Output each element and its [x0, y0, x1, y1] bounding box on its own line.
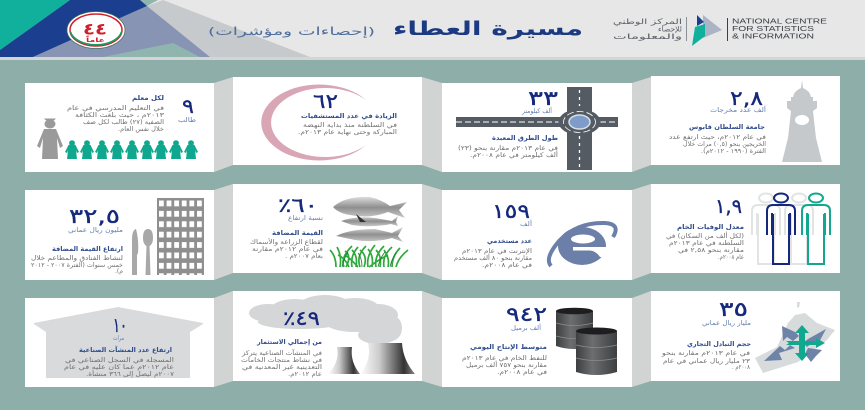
heading: عدد مستخدمي [487, 237, 532, 245]
unit: نسبة ارتفاع [288, 214, 323, 222]
heading: حجم التبادل التجاري [687, 340, 751, 348]
panel: share of investment [241, 295, 415, 378]
body text: المسجلة في السجل الصناعي في [65, 357, 174, 364]
body text [454, 248, 532, 269]
body text: السلطنة في عام ٢٠١٣م [669, 240, 744, 247]
folded strip row 2 [25, 184, 840, 280]
icon: internet browser e [549, 223, 616, 266]
panel: industrial establishments [34, 307, 203, 378]
panel: hotels and restaurants value added [31, 198, 204, 275]
icon: oil barrels [556, 308, 617, 375]
icon: crescent [261, 85, 366, 161]
panel: crude death rate [666, 194, 830, 264]
body text [462, 355, 547, 376]
body text: ٢٣ مليار ريال عماني في عام [663, 358, 751, 365]
body text: عام ٢٠١٢م عما كان عليه في عام [64, 364, 174, 371]
body text: في عام ٢٠١٢م مقارنة [252, 246, 323, 253]
icon: fish and grass [330, 197, 408, 267]
body text: مقارنة بنحو ٨٠ ألف مستخدم [454, 253, 532, 262]
number: 60 percent: ٦٠٪ [278, 193, 318, 217]
unit: ألف كيلومتر [521, 106, 552, 115]
unit: طالب [178, 116, 196, 124]
body text [458, 145, 558, 159]
body text: في السلطنة منذ بداية النهضة [303, 122, 397, 129]
heading: القيمة المضافة [272, 229, 323, 237]
body text [64, 357, 175, 378]
body text: بعام ٢٠٠٧م . [285, 253, 323, 260]
panel: internet users [454, 199, 616, 269]
body text [669, 134, 766, 155]
body text: عام ٢٠١٢م. [288, 371, 322, 378]
folded strip row 1 [25, 76, 840, 172]
panel: sultan qaboos university [669, 80, 822, 162]
body text: م). [115, 268, 123, 275]
unit: ألف برميل [511, 323, 541, 332]
body text: في المنشآت الصناعية يتركز [241, 348, 322, 357]
heading: متوسط الإنتاج اليومي [470, 343, 547, 351]
heading: من إجمالي الاستثمار [256, 338, 322, 346]
heading: ارتفاع القيمة المضافة [52, 245, 123, 253]
number: 32.5: ٣٢,٥ [69, 204, 120, 228]
number: 1.9: ١,٩ [715, 194, 742, 218]
panel: trade volume [661, 297, 835, 373]
body text: في التعليم المدرسي في عام [67, 105, 164, 112]
body text [67, 105, 165, 133]
body text: ٢٠٠٨م . [732, 364, 751, 371]
logo: national centre for statistics and information: FOR STATISTICS [732, 24, 814, 33]
panel: students per teacher [37, 94, 198, 159]
number: 62: ٦٢ [313, 89, 338, 113]
body text: ٢٠٠٧م ليصل إلى ٣٦٦ منشأة. [86, 369, 175, 378]
body text: في نشاط منتجات الخامات [241, 357, 322, 364]
body text: ألف كيلومتر في عام ٢٠٠٨م. [470, 150, 558, 159]
heading: الزيادة في عدد المستشفيات [301, 112, 397, 120]
heading: طول الطرق المعبدة [492, 134, 558, 142]
body text: التعدينية غير المعدنية في [242, 364, 322, 371]
logo: national centre for statistics and information: والمعلومات [613, 32, 683, 41]
body text [661, 350, 751, 371]
body text: للنفط الخام في عام ٢٠١٣م [462, 355, 547, 362]
icon: house shape [34, 307, 203, 378]
body text [31, 255, 123, 275]
body text: مقارنة بنحو ٧٥٧ ألف برميل [466, 360, 547, 369]
header band [0, 0, 865, 60]
icon: oman map with arrows [755, 302, 835, 373]
body text: في عام ٢٠١٢م، حيث ارتفع عدد [669, 134, 766, 141]
logo: national centre for statistics and information: المركز الوطني [613, 17, 682, 26]
icon: 44 years badge: ٤٤ [83, 20, 107, 38]
heading: ارتفاع عدد المنشآت الصناعية [79, 345, 172, 354]
logo: national centre for statistics and information: NATIONAL CENTRE [732, 16, 827, 26]
body text: ٢٠١٣م ، حيث بلغت الكثافة [75, 112, 165, 119]
icon: smoke cloud [249, 295, 402, 344]
number: 33: ٣٣ [528, 86, 558, 110]
icon: cooling towers [328, 343, 415, 374]
body text [666, 231, 744, 261]
icon: row of students [65, 140, 198, 159]
number: 942: ٩٤٢ [506, 302, 547, 326]
number: 9: ٩ [182, 94, 194, 118]
unit: ألف [520, 219, 532, 228]
body text: لقطاع الزراعة والأسماك [250, 238, 323, 246]
body text [298, 122, 397, 136]
unit: مرات [113, 334, 124, 342]
body text: خمس سنوات (الفترة ٢٠٠٧ - ٢٠١٢ [31, 262, 123, 269]
unit: مليون ريال عماني [68, 226, 123, 234]
unit: مليار ريال عماني [702, 319, 751, 327]
body text: خلال نفس العام. [118, 126, 164, 133]
heading: معدل الوفيات الخام [677, 223, 744, 231]
panel: oil production [462, 302, 617, 376]
icon: teacher [37, 118, 63, 159]
title: مسيرة العطاء [393, 18, 583, 40]
body text [250, 238, 323, 260]
heading: جامعة السلطان قابوس [689, 123, 765, 131]
folded strip row 3 [25, 291, 840, 387]
icon: minaret [782, 80, 822, 162]
body text: في عام ٢٠١٣م مقارنة بنحو (٢٣) [458, 145, 558, 152]
icon: 44 years badge [67, 12, 125, 48]
heading: لكل معلم [132, 94, 164, 102]
logo: national centre for statistics and information [613, 15, 827, 46]
body text: مقارنة بنحو ٢,٥٨ في [678, 247, 744, 254]
panel: hospitals increase [261, 85, 397, 161]
body text [241, 348, 322, 378]
body text: الإنترنت في عام ٢٠١٣م [462, 248, 532, 255]
logo: national centre for statistics and information: للإحصاء [658, 24, 682, 34]
icon: 44 years badge: عاماً [85, 36, 105, 44]
icon: four figures [752, 194, 830, 264]
number: 10: ١٠ [113, 313, 127, 337]
body text: في عام ٢٠١٣م مقارنة بنحو [661, 350, 750, 357]
panel: paved roads [456, 86, 618, 170]
body text: الصفية (٢٧) طالب لكل صف [83, 119, 164, 126]
number: 2.8: ٢,٨ [730, 86, 763, 110]
body text: (لكل ألف من السكان) في [666, 231, 744, 240]
panel: agriculture and fisheries [250, 193, 408, 267]
unit: ألف عدد مخرجات [710, 105, 766, 114]
number: 49 percent: ٤٩٪ [283, 306, 320, 330]
icon: roundabout road [456, 87, 618, 170]
body text: في عام ٢٠٠٨م. [497, 369, 547, 376]
body text: الفترة (١٩٩٠ - ٢٠١٢م). [701, 148, 766, 155]
body text: الخريجين بنحو (٠,٥) مرات خلال [683, 141, 766, 148]
body text: المباركة وحتى نهاية عام ٢٠١٣م. [298, 129, 397, 136]
subtitle: (إحصاءات ومؤشرات) [208, 25, 375, 38]
logo: national centre for statistics and information: & INFORMATION [732, 32, 814, 40]
body text: في عام ٢٠٠٨م. [482, 262, 532, 269]
number: 159: ١٥٩ [492, 199, 530, 223]
number: 35: ٣٥ [719, 297, 748, 321]
body text: لنشاط الفنادق والمطاعم خلال [31, 255, 123, 262]
body text: عام ٢٠٠٨م. [718, 254, 744, 261]
icon: building [157, 198, 204, 275]
icon: knife and fork [132, 229, 153, 275]
